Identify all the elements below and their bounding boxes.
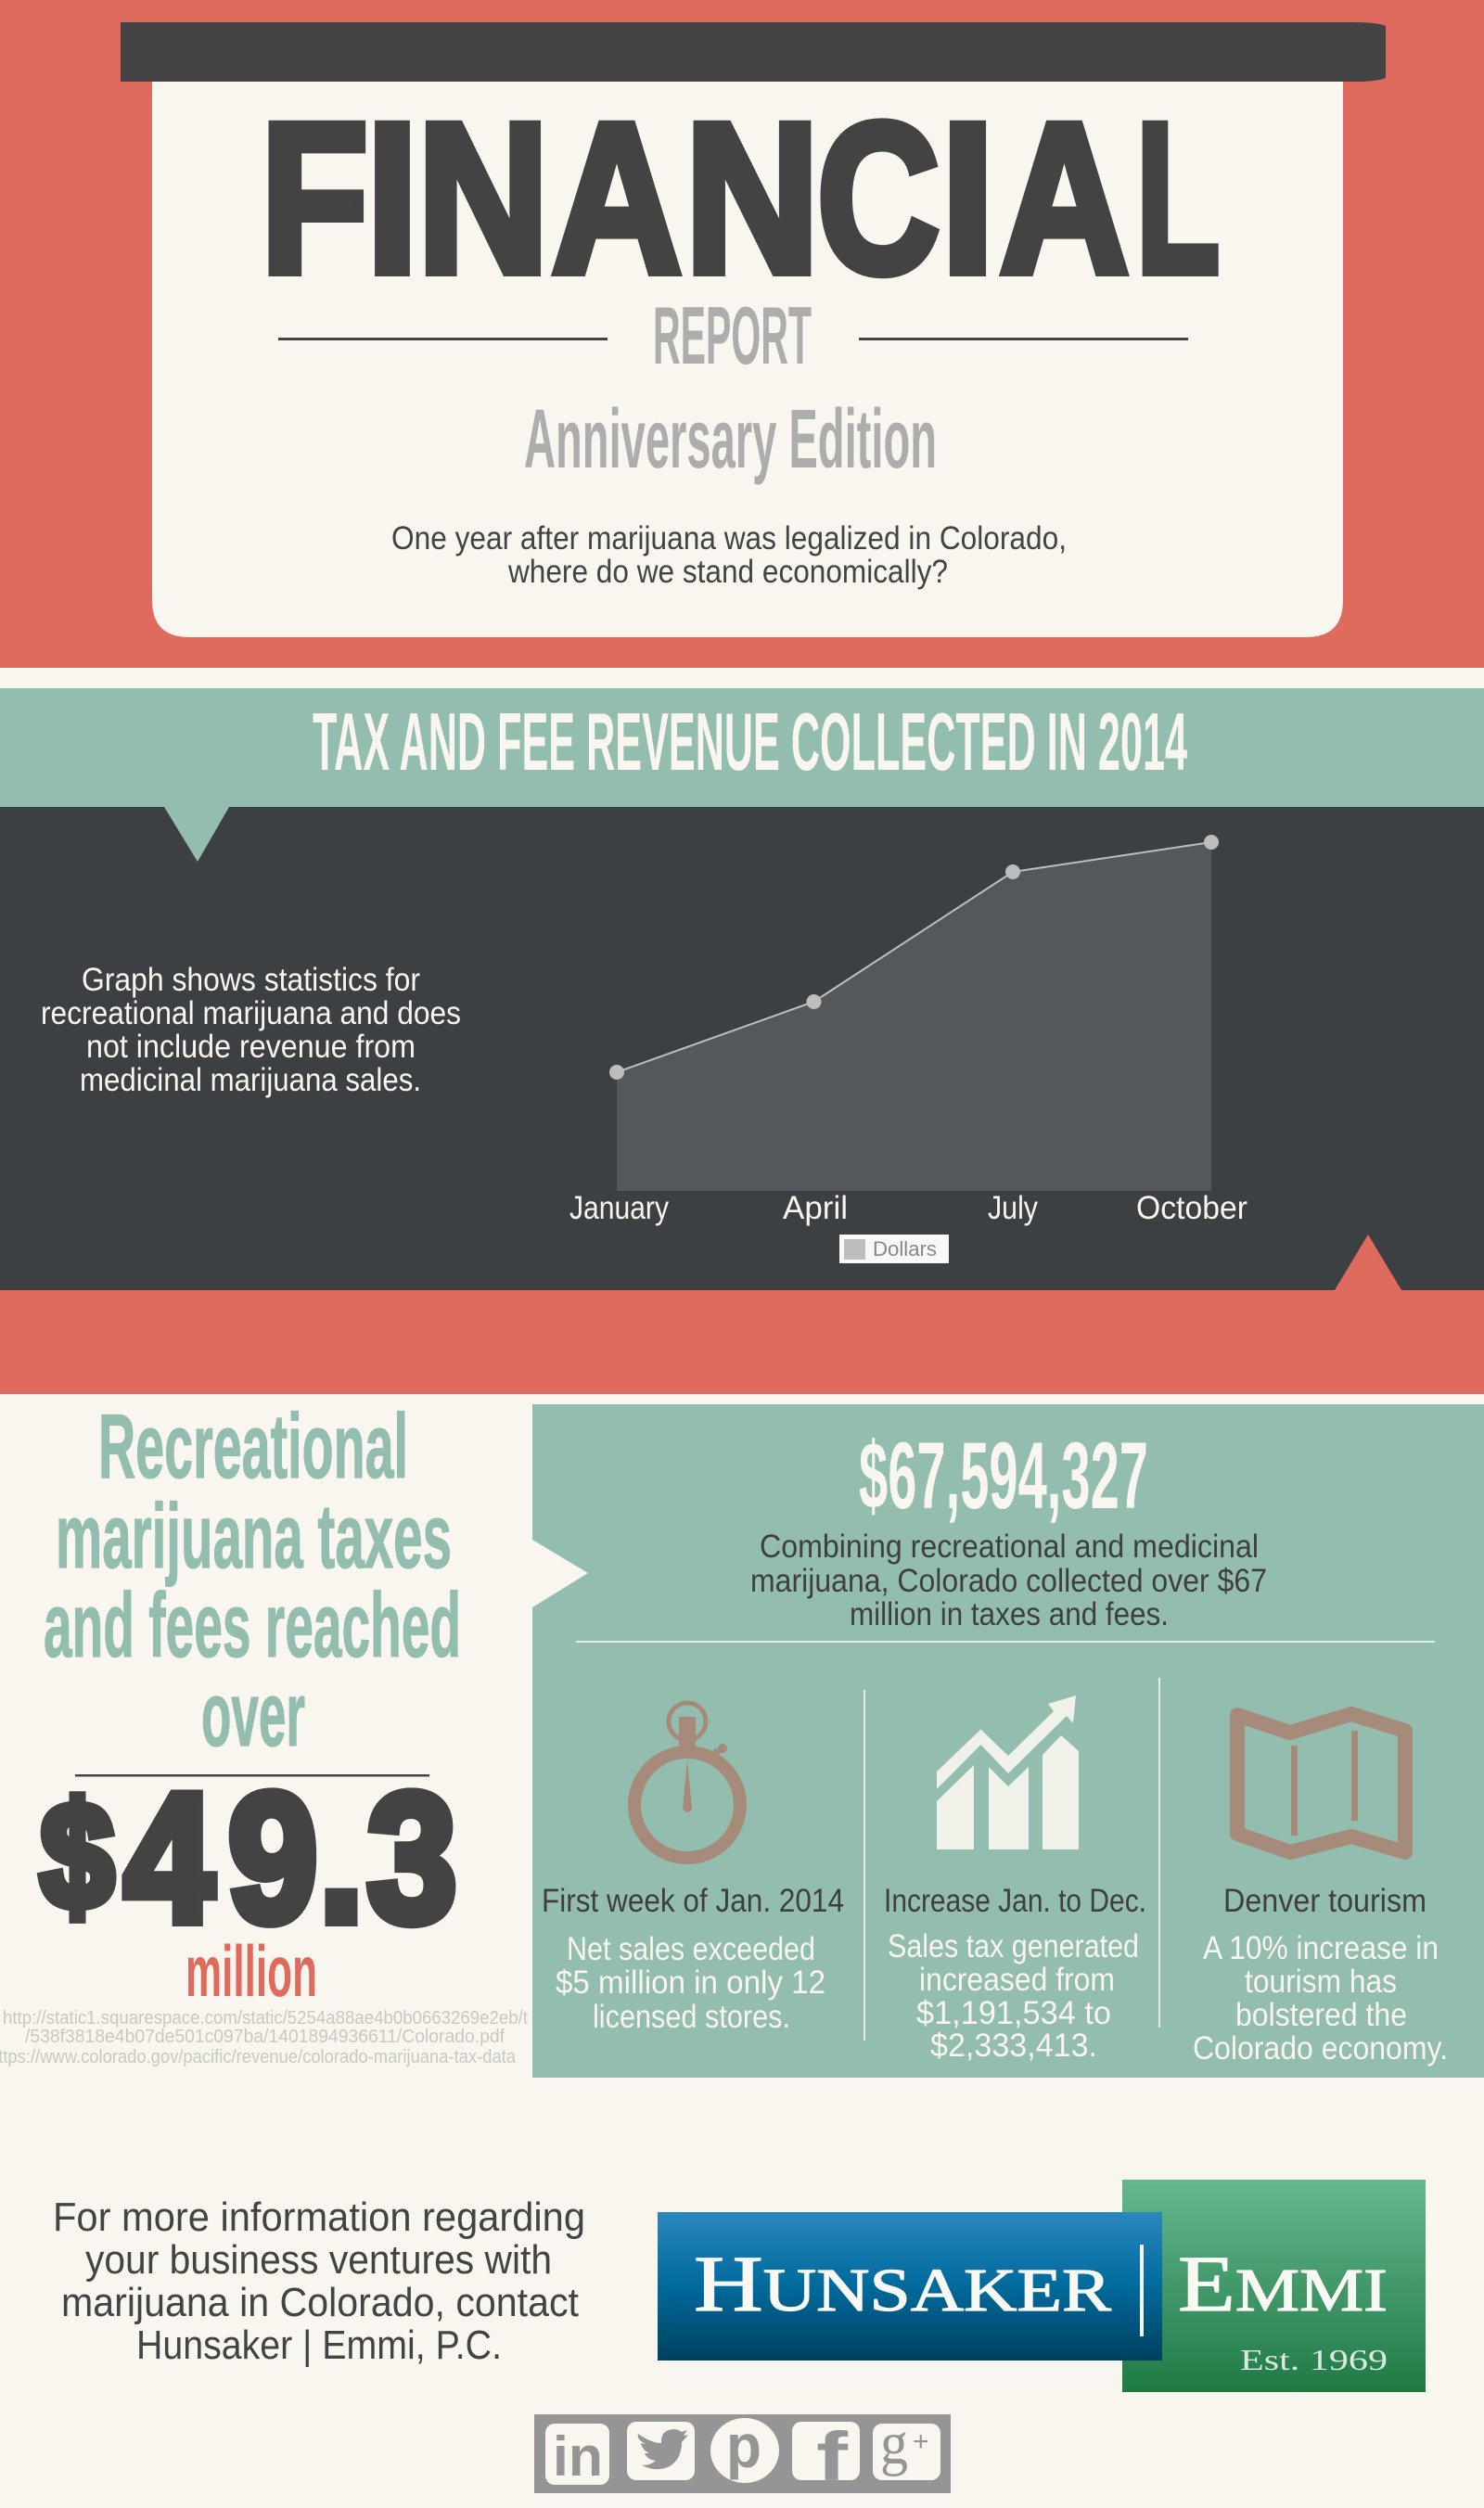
- stat: tourism: tourism has: [1245, 1964, 1397, 2000]
- title: N: [684, 79, 820, 317]
- subtitle: report: [278, 289, 1188, 381]
- stat: tourism: A 10% increase in: [1203, 1930, 1439, 1966]
- stat: increase: [884, 1883, 1146, 2064]
- total amount: $67,594,327: [859, 1423, 1148, 1529]
- teal heading band: [0, 688, 1484, 807]
- subtitle: report: REPORT: [653, 289, 812, 381]
- million label: million: [186, 1930, 317, 2012]
- chart legend: [839, 1235, 949, 1263]
- chart axis labels: January: [569, 1190, 669, 1226]
- dark top bar: [121, 22, 1386, 82]
- panel: revenue chart section: [0, 688, 1484, 1290]
- stat: increase: $2,333,413.: [930, 2028, 1097, 2064]
- icon: google plus: [873, 2410, 940, 2480]
- title: N: [417, 79, 549, 317]
- icon: google plus: +: [913, 2426, 929, 2457]
- icon: pinterest: [710, 2412, 779, 2483]
- chart axis labels: April: [783, 1190, 848, 1226]
- sources: /538f3818e4b07de501c097ba/1401894936611/Colorado.pdf: [25, 2027, 505, 2047]
- icon: twitter: [627, 2422, 695, 2480]
- chart note: medicinal marijuana sales.: [80, 1062, 421, 1098]
- stat: tourism: Denver tourism: [1223, 1883, 1426, 1919]
- chart legend: Dollars: [873, 1237, 937, 1260]
- logo: Hunsaker Emmi: [658, 2180, 1426, 2392]
- panel: recreational total: [0, 1395, 528, 2067]
- total description: [750, 1529, 1267, 1632]
- total description: marijuana, Colorado collected over $67: [750, 1563, 1267, 1599]
- total description: Combining recreational and medicinal: [760, 1529, 1259, 1565]
- icon: linkedin: in: [553, 2425, 603, 2488]
- title: I: [366, 79, 418, 317]
- title: A: [1000, 79, 1129, 317]
- contact text: Hunsaker | Emmi, P.C.: [136, 2322, 502, 2368]
- icon: stopwatch: [634, 1703, 740, 1858]
- social icons: [534, 2410, 951, 2495]
- title: C: [817, 79, 940, 317]
- title: A: [552, 79, 682, 317]
- chart axis labels: [569, 1190, 1247, 1226]
- stat: first week: [542, 1883, 844, 2035]
- recreational heading: [44, 1395, 461, 1765]
- icon: map: [1237, 1714, 1405, 1852]
- logo: Hunsaker Emmi: EMMI: [1178, 2239, 1388, 2328]
- chart note: not include revenue from: [86, 1029, 416, 1065]
- chart note: Graph shows statistics for: [82, 962, 420, 998]
- big number: 49.3: [124, 1757, 456, 1960]
- stat: first week: Net sales exceeded: [567, 1931, 815, 1967]
- contact text: your business ventures with: [85, 2237, 552, 2283]
- chart note: [41, 962, 461, 1098]
- contact text: marijuana in Colorado, contact: [61, 2280, 579, 2325]
- panel: combined total: [532, 1404, 1484, 2078]
- title: F: [261, 79, 368, 317]
- stat: increase: Increase Jan. to Dec.: [884, 1883, 1146, 1919]
- icon: facebook: f: [816, 2418, 848, 2495]
- logo: Hunsaker Emmi: Est. 1969: [1240, 2343, 1388, 2376]
- chart axis labels: July: [988, 1190, 1038, 1226]
- logo: Hunsaker Emmi: HUNSAKER: [694, 2239, 1111, 2328]
- recreational heading: marijuana taxes: [56, 1485, 452, 1587]
- icon: facebook: [792, 2418, 860, 2495]
- sources: [0, 2008, 528, 2067]
- stat: first week: licensed stores.: [593, 1999, 790, 2035]
- contact text: [53, 2194, 585, 2368]
- intro text: [391, 520, 1067, 590]
- stat: tourism: bolstered the: [1235, 1997, 1407, 2033]
- contact text: For more information regarding: [53, 2194, 585, 2240]
- stat: tourism: [1193, 1883, 1448, 2067]
- icon: growth chart: [937, 1695, 1079, 1849]
- subtitle: anniversary edition: Anniversary Edition: [524, 393, 937, 486]
- stat: first week: $5 million in only 12: [556, 1964, 825, 2001]
- stat: tourism: Colorado economy.: [1193, 2030, 1448, 2067]
- sources: http://static1.squarespace.com/static/5254a88ae4b0b0663269e2eb/t: [3, 2008, 528, 2028]
- icon: pinterest: p: [726, 2412, 761, 2480]
- icon: google plus: g: [880, 2410, 908, 2477]
- recreational heading: Recreational: [98, 1395, 408, 1497]
- intro text: One year after marijuana was legalized in Colorado,: [391, 520, 1067, 557]
- stat: first week: First week of Jan. 2014: [542, 1883, 844, 1919]
- chart axis labels: October: [1136, 1190, 1247, 1226]
- area chart: [609, 835, 1219, 1191]
- stat: increase: Sales tax generated: [888, 1928, 1139, 1964]
- sources: https://www.colorado.gov/pacific/revenue/colorado-marijuana-tax-data: [0, 2047, 517, 2067]
- recreational heading: and fees reached: [44, 1574, 461, 1676]
- big number: $: [41, 1773, 113, 1939]
- paper card: [152, 82, 1343, 637]
- recreational heading: over: [201, 1663, 305, 1765]
- teal pointer: [164, 807, 229, 862]
- intro text: where do we stand economically?: [507, 554, 948, 590]
- panel: header: [0, 0, 1484, 668]
- red pointer: [1335, 1235, 1401, 1290]
- stat: increase: $1,191,534 to: [916, 1995, 1111, 2031]
- title: L: [1136, 79, 1220, 317]
- total description: million in taxes and fees.: [850, 1596, 1169, 1632]
- red band: [0, 1290, 1484, 1394]
- chart note: recreational marijuana and does: [41, 995, 461, 1031]
- stat: increase: increased from: [919, 1962, 1115, 1998]
- title: I: [940, 79, 994, 317]
